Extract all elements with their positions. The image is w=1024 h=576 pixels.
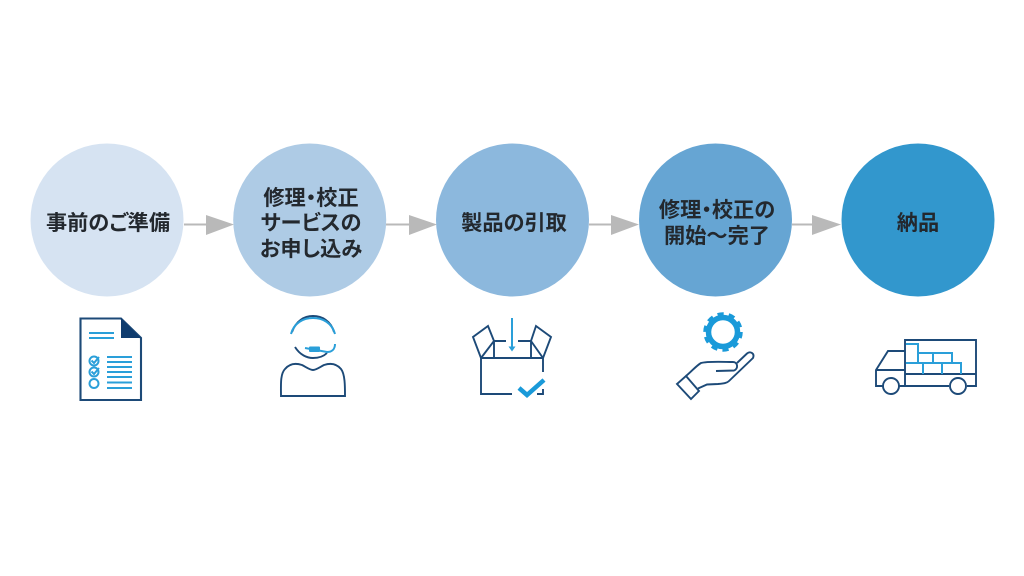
icon: document checklist (80, 318, 141, 400)
arrow 2 to 3 (386, 215, 437, 235)
step 1 label: 事前のご準備 (46, 210, 170, 235)
icon: delivery truck (876, 340, 976, 394)
step 5: delivery (842, 144, 994, 296)
step 3: pickup (436, 144, 589, 296)
step 4 label: 開始～完了 (664, 224, 770, 248)
step 2 label: 修理・校正 (263, 186, 359, 210)
step 4: start of repair (639, 144, 792, 296)
icon: headset operator (281, 316, 345, 396)
step 3 label: 製品の引取 (461, 211, 567, 235)
arrow 1 to 2 (184, 215, 234, 235)
icon: gear over hand (677, 314, 753, 399)
step 4 label: 修理・校正の (659, 198, 775, 222)
icon: open box with check (473, 318, 551, 395)
arrow 4 to 5 (792, 215, 841, 235)
step 2 label: サービスの (261, 211, 361, 235)
step 1: preparation (30, 144, 184, 296)
step 2: application (233, 144, 386, 296)
step 2 label: お申し込み (260, 237, 362, 261)
step 5 label: 納品 (897, 211, 939, 235)
arrow 3 to 4 (589, 215, 639, 235)
